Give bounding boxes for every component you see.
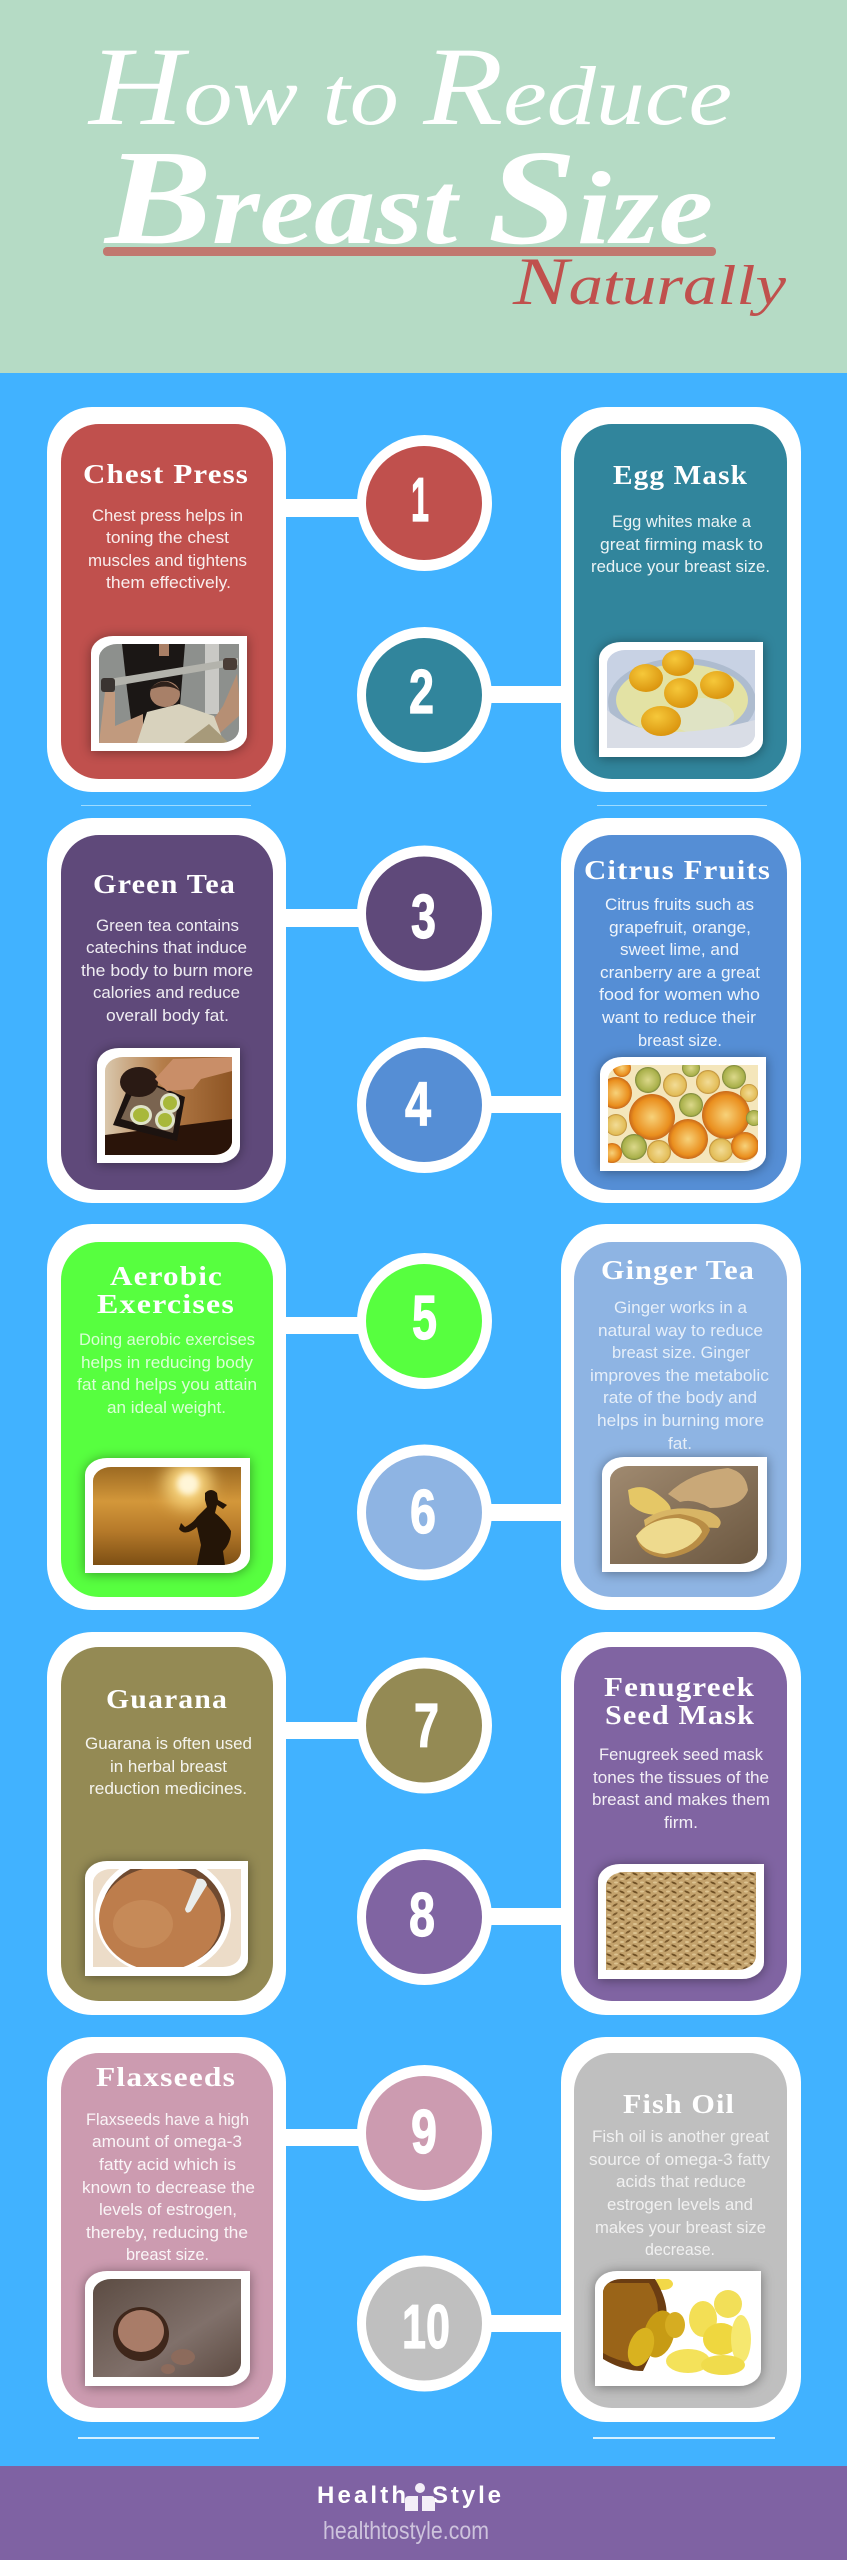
panel: Aerobic Exercises card [47, 1224, 286, 1610]
text block: Aerobic Exercises: fat and helps you attain [77, 1375, 257, 1394]
title underline [103, 247, 716, 256]
connector 10 [488, 2315, 562, 2332]
connector 6 [488, 1504, 562, 1521]
photo: ginger root [602, 1457, 767, 1572]
number badge 6: 6 [410, 1478, 436, 1547]
text block: Ginger Tea: Ginger works in a [614, 1298, 748, 1317]
text block: Citrus Fruits [599, 895, 760, 1050]
photo: flaxseed bowl [85, 2271, 250, 2386]
text block: Fenugreek Seed Mask: breast and makes them [592, 1790, 770, 1809]
text block: Ginger Tea: rate of the body and [603, 1388, 757, 1407]
text block: Chest Press: muscles and tightens [88, 551, 247, 570]
text block: Fish Oil: acids that reduce [616, 2172, 746, 2191]
text block: Citrus Fruits: sweet lime, and [620, 940, 739, 959]
text block: Egg Mask [591, 512, 770, 576]
panel: Citrus Fruits card [561, 818, 801, 1203]
text block: Fenugreek Seed Mask [592, 1745, 770, 1832]
panel: Fish Oil card [561, 2037, 801, 2422]
text block: Egg Mask: Egg whites make a [612, 512, 752, 531]
panel: Flaxseeds card [47, 2037, 286, 2422]
text block: Chest Press: toning the chest [106, 528, 229, 547]
number badge 4: 4 [405, 1070, 431, 1139]
number badge 4 [357, 1037, 492, 1173]
connector 1 [286, 499, 362, 517]
text block: Citrus Fruits: food for women who [599, 985, 760, 1004]
header banner [0, 0, 847, 373]
text block: Flaxseeds: known to decrease the [82, 2178, 255, 2197]
divider lines [81, 805, 767, 806]
photo: fenugreek seeds [598, 1864, 764, 1979]
text block: Egg Mask: great firming mask to [600, 535, 763, 554]
number badge 9: 9 [411, 2098, 437, 2167]
heading: Chest Press: Chest Press [83, 459, 249, 489]
number badge 3: 3 [411, 883, 436, 952]
connector 8 [488, 1908, 562, 1925]
text block: Fish Oil: decrease. [645, 2240, 715, 2259]
panel: Ginger Tea card [561, 1224, 801, 1610]
text block: Ginger Tea: improves the metabolic [590, 1366, 769, 1385]
text block: Green Tea: Green tea contains [96, 916, 239, 935]
connector 5 [286, 1317, 362, 1334]
text block: Citrus Fruits: breast size. [638, 1031, 722, 1050]
heading: Aerobic Exercises [97, 1261, 235, 1319]
photo: pouring green tea [97, 1048, 240, 1163]
text block: Egg Mask: reduce your breast size. [591, 557, 770, 576]
icon: people [405, 2483, 435, 2511]
heading: Ginger Tea: Ginger Tea [601, 1255, 755, 1285]
footer band [0, 2466, 847, 2560]
number badge 7: 7 [414, 1692, 439, 1761]
number badge 2: 2 [409, 658, 434, 727]
text block: Citrus Fruits: cranberry are a great [600, 963, 760, 982]
text block: Ginger Tea: helps in burning more [597, 1411, 764, 1430]
photo: runner at sunset [85, 1458, 250, 1573]
heading: Fenugreek Seed Mask: Seed Mask [605, 1700, 755, 1730]
photo: bench press [91, 636, 247, 751]
heading: Citrus Fruits: Citrus Fruits [584, 855, 771, 885]
photo: fish oil capsules [595, 2271, 761, 2386]
heading: Guarana: Guarana [106, 1684, 228, 1714]
text block: Aerobic Exercises: an ideal weight. [107, 1398, 226, 1417]
text block: Flaxseeds: fatty acid which is [99, 2155, 236, 2174]
text block: Green Tea: overall body fat. [106, 1006, 229, 1025]
number badge 10: 10 [402, 2293, 450, 2362]
text block: Ginger Tea: breast size. Ginger [612, 1343, 750, 1362]
panel: Guarana card [47, 1632, 286, 2015]
number badge 1 [357, 435, 492, 571]
text block: Fish Oil [589, 2127, 771, 2259]
website url: healthtostyle.com [323, 2517, 489, 2545]
text block: Aerobic Exercises [77, 1330, 257, 1417]
text block: Aerobic Exercises: Doing aerobic exercises [79, 1330, 255, 1349]
text block: Chest Press [88, 506, 247, 592]
subtitle: Naturally: Naturally [512, 243, 786, 319]
text block: Chest Press: them effectively. [106, 573, 231, 592]
text block: Fish Oil: estrogen levels and [607, 2195, 753, 2214]
number badge 8 [357, 1849, 492, 1985]
text block: Flaxseeds [82, 2110, 255, 2264]
number badge 8: 8 [409, 1881, 435, 1950]
heading: Aerobic Exercises: Exercises [97, 1289, 235, 1319]
text block: Fish Oil: source of omega-3 fatty [589, 2150, 771, 2169]
panel: Fenugreek Seed Mask card [561, 1632, 801, 2015]
text block: Guarana: Guarana is often used [85, 1734, 252, 1753]
text block: Ginger Tea: natural way to reduce [598, 1321, 763, 1340]
text block: Flaxseeds: amount of omega-3 [92, 2132, 242, 2151]
text block: Flaxseeds: thereby, reducing the [86, 2223, 248, 2242]
photo: guarana powder [85, 1855, 248, 1976]
panel: Chest Press card [47, 407, 286, 792]
heading: Fenugreek Seed Mask: Fenugreek [604, 1672, 755, 1702]
text block: Citrus Fruits: want to reduce their [601, 1008, 756, 1027]
text block: Ginger Tea: fat. [668, 1434, 692, 1453]
text block: Fenugreek Seed Mask: Fenugreek seed mask [599, 1745, 763, 1764]
text block: Guarana: in herbal breast [110, 1757, 227, 1776]
number badge 10 [357, 2256, 492, 2392]
text block: Green Tea: the body to burn more [81, 961, 253, 980]
connector 2 [488, 686, 562, 703]
panel: Egg Mask card [561, 407, 801, 792]
heading: Aerobic Exercises: Aerobic [110, 1261, 223, 1291]
number badge 1: 1 [411, 466, 429, 535]
number badge 6 [357, 1444, 492, 1580]
title: How to Reduce: How to Reduce [87, 25, 732, 149]
panel: Green Tea card [47, 818, 286, 1203]
brand: Health Style [317, 2482, 501, 2511]
title: Breast Size: Breast Size [103, 123, 713, 273]
brand: Health Style: Health [317, 2482, 406, 2509]
connector 9 [286, 2129, 362, 2146]
text block: Flaxseeds: breast size. [126, 2245, 209, 2264]
text block: Fenugreek Seed Mask: firm. [664, 1813, 698, 1832]
photo: egg yolks in bowl [599, 642, 763, 757]
brand: Health Style: Style [432, 2482, 501, 2509]
number badge 5: 5 [412, 1284, 437, 1353]
text block: Green Tea: catechins that induce [86, 938, 247, 957]
bottom divider lines [78, 2437, 775, 2439]
text block: Green Tea: calories and reduce [93, 983, 240, 1002]
number badge 9 [357, 2065, 492, 2201]
text block: Fish Oil: makes your breast size [595, 2218, 766, 2237]
text block: Citrus Fruits: grapefruit, orange, [609, 918, 751, 937]
text block: Guarana [85, 1734, 252, 1798]
text block: Citrus Fruits: Citrus fruits such as [605, 895, 754, 914]
text block: Flaxseeds: Flaxseeds have a high [86, 2110, 249, 2129]
heading: Egg Mask: Egg Mask [613, 460, 748, 490]
text block: Aerobic Exercises: helps in reducing body [81, 1353, 253, 1372]
photo: citrus slices [600, 1057, 766, 1171]
text block: Chest Press: Chest press helps in [92, 506, 243, 525]
text block: Green Tea [81, 916, 253, 1025]
connector 3 [286, 909, 362, 927]
heading: Fenugreek Seed Mask [604, 1672, 755, 1730]
text block: Ginger Tea [590, 1298, 769, 1453]
heading: Green Tea: Green Tea [93, 869, 236, 899]
connector 4 [488, 1096, 562, 1113]
heading: Fish Oil: Fish Oil [623, 2089, 735, 2119]
text block: Fenugreek Seed Mask: tones the tissues of the [593, 1768, 769, 1787]
heading: Flaxseeds: Flaxseeds [96, 2062, 236, 2092]
number badge 3 [357, 846, 492, 982]
text block: Guarana: reduction medicines. [89, 1779, 247, 1798]
number badge 7 [357, 1658, 492, 1794]
connector 7 [286, 1722, 362, 1739]
number badge 2 [357, 627, 492, 763]
text block: Fish Oil: Fish oil is another great [592, 2127, 769, 2146]
text block: Flaxseeds: levels of estrogen, [99, 2200, 237, 2219]
number badge 5 [357, 1253, 492, 1389]
